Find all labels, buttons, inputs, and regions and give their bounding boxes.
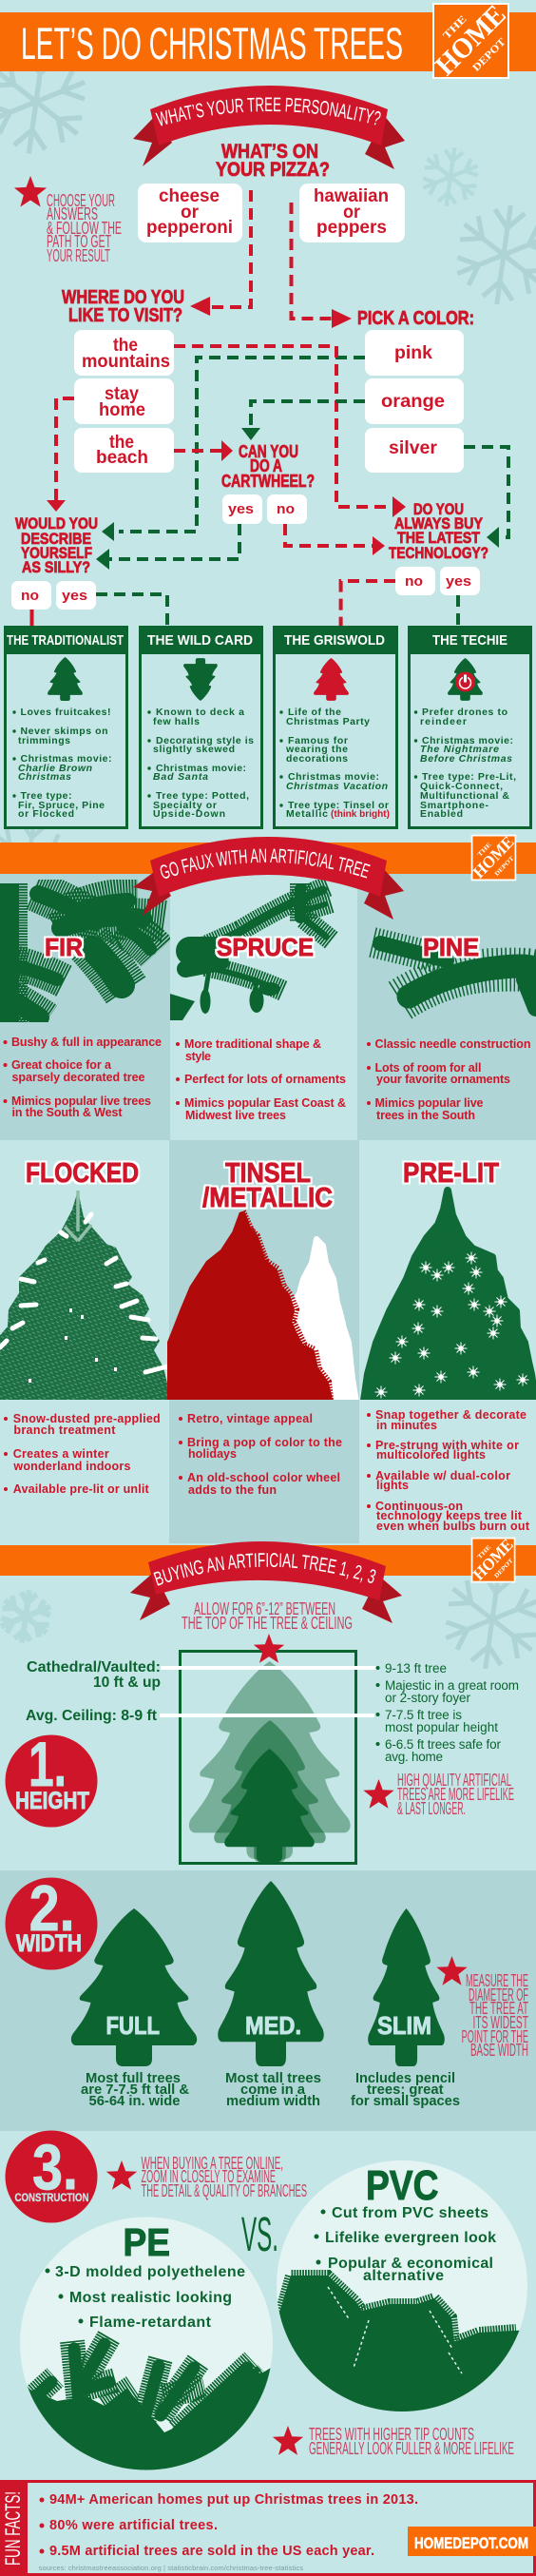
tree: slim bbox=[368, 1908, 445, 2066]
badge: 3 construction: 3. bbox=[32, 2131, 78, 2203]
question: would you describe yourself as silly: WOULD YOU bbox=[15, 514, 98, 533]
panel: the traditionalist: Christmas bbox=[18, 771, 71, 783]
badge: 1 height: 1. bbox=[29, 1729, 67, 1799]
text: pre-lit bullets: Continuous-on bbox=[375, 1500, 463, 1513]
text: medium description: medium width bbox=[226, 2094, 320, 2109]
text: flocked bullets: Creates a winter bbox=[13, 1447, 109, 1461]
text: spruce bullets: Midwest live trees bbox=[185, 1109, 286, 1122]
answers: cartwheel yes no: yes bbox=[228, 501, 254, 517]
badge: 2 width bbox=[6, 1872, 97, 1970]
question: what's on your pizza: WHAT’S ON bbox=[221, 141, 318, 163]
panel: the techie: Quick-Connect, bbox=[420, 781, 503, 792]
panel: the griswold: Life of the bbox=[288, 707, 341, 718]
answer: the mountains bbox=[74, 330, 174, 376]
text: fir bullets: sparsely decorated tree bbox=[11, 1071, 145, 1084]
panel: the griswold: Christmas Vacation bbox=[286, 781, 388, 792]
panel: the griswold: (think bright) bbox=[331, 808, 390, 820]
panel: the wild card: Upside-Down bbox=[153, 808, 225, 820]
panel: the wild card: slightly skewed bbox=[153, 744, 235, 755]
answer: silver: silver bbox=[389, 438, 438, 458]
arrow: pink path bbox=[102, 358, 365, 541]
logo: small home depot: DEPOT bbox=[493, 855, 516, 878]
panel: the wild card: Decorating style is bbox=[156, 735, 254, 746]
answer: cheese or pepperoni: cheese bbox=[159, 186, 220, 206]
text: flocked bullets: wonderland indoors bbox=[12, 1460, 130, 1473]
text: fir bullets: in the South & West bbox=[11, 1106, 123, 1119]
question: pick a color: PICK A COLOR: bbox=[357, 308, 474, 329]
panel: the techie: Before Christmas bbox=[420, 753, 512, 765]
text: slim description: trees; great bbox=[367, 2082, 444, 2098]
text: pre-lit bullets: even when bulbs burn out bbox=[376, 1520, 530, 1533]
question: do you always buy the latest technology: ALWAYS BUY bbox=[394, 514, 484, 533]
label: average ceiling: Avg. Ceiling: 8-9 ft bbox=[26, 1708, 158, 1724]
panel: the techie: reindeer bbox=[420, 716, 467, 727]
panel: the traditionalist: or Flocked bbox=[18, 808, 74, 820]
answer: stay home bbox=[74, 378, 174, 424]
heading: PE: PE bbox=[124, 2220, 170, 2264]
text: fun fact list bbox=[40, 2492, 418, 2559]
panel: the griswold: wearing the bbox=[285, 744, 348, 755]
question: do you always buy the latest technology bbox=[389, 500, 488, 562]
panel: the techie: Tree type: Pre-Lit, bbox=[422, 771, 516, 783]
answers: technology no yes: yes bbox=[446, 573, 471, 590]
text: flocked bullets: branch treatment bbox=[13, 1424, 116, 1437]
icon: snowflake right bbox=[447, 199, 536, 311]
ribbon: go faux with an artificial tree: GO FAUX WITH AN ARTIFICIAL TREE bbox=[160, 848, 371, 879]
answer: pink: pink bbox=[394, 343, 432, 363]
arrow: cartwheel no bbox=[285, 524, 385, 555]
badge: 1 height: HEIGHT bbox=[15, 1788, 89, 1814]
panel: the wild card: Bad Santa bbox=[153, 771, 208, 783]
arrow: beach path bbox=[174, 440, 233, 461]
answer: cheese or pepperoni: pepperoni bbox=[146, 218, 233, 238]
panel: the wild card: Tree type: Potted, bbox=[156, 790, 249, 802]
tree: full bbox=[71, 1908, 197, 2066]
text: pine bullets: Lots of room for all bbox=[374, 1061, 481, 1075]
callout: choose your answers: & FOLLOW THE bbox=[47, 219, 122, 238]
logo: small home depot: THE bbox=[476, 1544, 492, 1560]
text: full description: Most full trees bbox=[86, 2071, 181, 2086]
callout: allow for 6-12 inches: THE TOP OF THE TREE & CEILING bbox=[182, 1614, 353, 1633]
text: PE bullets: Most realistic looking bbox=[69, 2290, 232, 2306]
text: pine bullets bbox=[367, 1037, 530, 1122]
panel: the griswold: Christmas Party bbox=[286, 716, 370, 727]
panel: flocked bbox=[0, 1160, 167, 1495]
callout: allow for 6-12 inches bbox=[182, 1599, 353, 1633]
badge: 3 construction bbox=[6, 2130, 97, 2223]
text: flocked bullets bbox=[4, 1412, 161, 1496]
text: medium description bbox=[225, 2071, 321, 2109]
question: can you do a cartwheel: CARTWHEEL? bbox=[221, 472, 315, 491]
text: height bullets: 6-6.5 ft trees safe for bbox=[385, 1737, 502, 1752]
callout: high quality: & LAST LONGER. bbox=[397, 1799, 466, 1818]
heading: pre-lit: PRE-LIT bbox=[403, 1158, 499, 1189]
header band bbox=[0, 12, 536, 71]
text: PE bullets: 3-D molded polyethelene bbox=[55, 2264, 245, 2280]
panel: the wild card: few halls bbox=[153, 716, 200, 727]
icon: red tree bbox=[314, 658, 349, 701]
text: PVC bullets bbox=[314, 2205, 496, 2284]
text: tinsel bullets: holidays bbox=[188, 1447, 237, 1461]
answers: technology no yes bbox=[395, 567, 480, 595]
text: slim description: for small spaces bbox=[351, 2094, 460, 2109]
question: do you always buy the latest technology: TECHNOLOGY? bbox=[389, 544, 488, 562]
text: height bullets: 9-13 ft tree bbox=[385, 1661, 447, 1675]
tree: slim: SLIM bbox=[377, 2011, 431, 2040]
badge: 3 construction: CONSTRUCTION bbox=[15, 2193, 89, 2204]
answers: technology no yes: no bbox=[405, 573, 423, 590]
panel: fir bbox=[0, 874, 170, 1140]
panel: PVC circle bbox=[276, 2160, 532, 2425]
section band: buying bbox=[0, 1545, 536, 1576]
text: pre-lit bullets: technology keeps tree lit bbox=[376, 1509, 523, 1522]
logo: The Home Depot: DEPOT bbox=[470, 36, 508, 74]
logo: small home depot: THE bbox=[476, 842, 493, 859]
tree: medium: MED. bbox=[245, 2011, 301, 2040]
answer: the beach: beach bbox=[96, 448, 148, 468]
text: spruce bullets: Mimics popular East Coast & bbox=[184, 1096, 346, 1110]
panel: the traditionalist: Tree type: bbox=[21, 790, 72, 802]
image: pre-lit tree bbox=[363, 1191, 536, 1407]
question: what's on your pizza bbox=[216, 141, 330, 181]
heading: PVC: PVC bbox=[366, 2162, 439, 2209]
callout: choose your answers: YOUR RESULT bbox=[47, 246, 110, 265]
panel: the techie: THE TECHIE bbox=[432, 632, 507, 649]
text: PE bullets bbox=[46, 2264, 245, 2331]
label: cathedral vaulted: Cathedral/Vaulted: bbox=[27, 1659, 161, 1675]
text: spruce bullets bbox=[176, 1037, 346, 1122]
icon: tree with power button bbox=[448, 658, 483, 701]
arrow: cartwheel yes bbox=[96, 524, 239, 570]
text: spruce bullets: style bbox=[185, 1050, 211, 1063]
arrow: mountains path bbox=[174, 346, 406, 517]
panel: the techie: The Nightmare bbox=[420, 744, 499, 755]
callout: choose your answers bbox=[14, 176, 122, 265]
arrow: cheese to where do you like to visit bbox=[190, 190, 251, 316]
text: full description: 56-64 in. wide bbox=[89, 2094, 181, 2109]
heading: tinsel metallic bbox=[202, 1158, 333, 1213]
callout: when buying online bbox=[106, 2154, 307, 2200]
text: pre-lit bullets: lights bbox=[376, 1479, 409, 1492]
panel: fun facts bbox=[0, 2480, 536, 2576]
answer: orange: orange bbox=[381, 392, 445, 412]
image: pine branch bbox=[373, 942, 536, 1008]
icon: section 3 small snowflake bbox=[0, 1586, 56, 1647]
panel: the griswold: Famous for bbox=[288, 735, 348, 746]
text: PVC bullets: Cut from PVC sheets bbox=[332, 2205, 488, 2221]
panel: the techie: Smartphone- bbox=[420, 800, 488, 811]
arrow: silver path bbox=[464, 447, 508, 548]
heading: flocked: FLOCKED bbox=[26, 1158, 139, 1189]
logo: small home depot: DEPOT bbox=[493, 1557, 515, 1579]
text: pre-lit bullets bbox=[367, 1408, 530, 1533]
panel: the griswold: Tree type: Tinsel or bbox=[288, 800, 389, 811]
heading: fir: FIR bbox=[45, 933, 83, 961]
text: fun fact list: 94M+ American homes put up Christmas trees in 2013. bbox=[49, 2492, 418, 2508]
ribbon: go faux with an artificial tree bbox=[133, 837, 404, 920]
ribbon: what's your tree personality: WHAT’S YOUR TREE PERSONALITY? bbox=[156, 97, 381, 126]
connector: silly yes to wild card bbox=[96, 594, 167, 626]
text: fun fact list: 80% were artificial trees. bbox=[49, 2518, 218, 2533]
question: where do you like to visit: WHERE DO YOU bbox=[62, 287, 184, 308]
panel: the wild card: Specialty or bbox=[153, 800, 217, 811]
text: sources: sources: christmastreeassociation.org | statisticbrain.com/christmas-tree-statistics bbox=[39, 2564, 303, 2572]
text: height bullets: Majestic in a great room bbox=[385, 1678, 519, 1693]
panel: the traditionalist: Fir, Spruce, Pine bbox=[18, 800, 105, 811]
panel: the wild card: Known to deck a bbox=[156, 707, 244, 718]
chart: tree height diagram bbox=[160, 1634, 376, 1864]
text: pre-lit bullets: in minutes bbox=[376, 1419, 437, 1432]
connector: technology no to griswold bbox=[341, 581, 395, 626]
answers: cartwheel yes no bbox=[222, 494, 307, 524]
icon: snowflake lower left bbox=[0, 812, 78, 909]
text: tinsel bullets bbox=[179, 1412, 342, 1497]
callout: choose your answers: ANSWERS bbox=[47, 204, 98, 223]
text: fun fact list: 9.5M artificial trees are sold in the US each year. bbox=[49, 2544, 374, 2559]
text: height bullets bbox=[376, 1661, 519, 1764]
text: height bullets: avg. home bbox=[385, 1750, 443, 1764]
answer: cheese or pepperoni: or bbox=[181, 203, 200, 223]
icon: section 3 large snowflake bbox=[435, 1563, 536, 1675]
panel: the griswold bbox=[273, 626, 398, 827]
label: cathedral vaulted bbox=[27, 1659, 161, 1691]
text: spruce bullets: Perfect for lots of ornaments bbox=[184, 1073, 346, 1086]
text: flocked bullets: Available pre-lit or unlit bbox=[13, 1482, 150, 1496]
answer: hawaiian or peppers: hawaiian bbox=[314, 186, 389, 206]
answer: orange bbox=[365, 378, 464, 424]
ribbon: buying an artificial tree 1 2 3: BUYING AN ARTIFICIAL TREE 1, 2, 3 bbox=[154, 1553, 376, 1586]
text: height bullets: or 2-story foyer bbox=[385, 1691, 471, 1705]
text: pre-lit bullets: Available w/ dual-color bbox=[375, 1469, 510, 1482]
callout: higher tip counts bbox=[273, 2425, 514, 2458]
answer: hawaiian or peppers bbox=[299, 184, 405, 242]
panel: the traditionalist: Loves fruitcakes! bbox=[21, 707, 110, 718]
question: where do you like to visit: LIKE TO VISIT? bbox=[68, 305, 182, 326]
text: pre-lit bullets: Snap together & decorate bbox=[375, 1408, 526, 1422]
icon: snowflake top left bbox=[0, 43, 96, 161]
ribbon: what's your tree personality bbox=[133, 86, 405, 169]
answer: stay home: stay bbox=[105, 384, 139, 404]
answer: pink bbox=[365, 330, 464, 376]
text: fir bullets: Bushy & full in appearance bbox=[11, 1036, 162, 1049]
label: cathedral vaulted: 10 ft & up bbox=[93, 1675, 161, 1691]
arrow: hawaiian to pick a color bbox=[291, 203, 352, 328]
arrow: orange path bbox=[241, 401, 365, 440]
answers: silly no yes bbox=[11, 581, 96, 610]
answer: the beach: the bbox=[109, 433, 134, 453]
panel: the techie bbox=[408, 626, 532, 827]
icon: small snowflake bbox=[416, 144, 485, 210]
panel: the wild card: THE WILD CARD bbox=[147, 632, 253, 649]
text: spruce bullets: More traditional shape & bbox=[184, 1037, 321, 1051]
panel: pre-lit bbox=[359, 1140, 536, 1543]
logo: small home depot: HOME bbox=[469, 832, 517, 882]
panel: the wild card: Christmas movie: bbox=[156, 763, 246, 774]
text: tinsel bullets: An old-school color wheel bbox=[187, 1471, 340, 1484]
text: pine bullets: your favorite ornaments bbox=[376, 1073, 510, 1086]
icon: upside-down tree bbox=[183, 658, 218, 701]
text: PE bullets: Flame-retardant bbox=[89, 2315, 212, 2331]
question: can you do a cartwheel bbox=[221, 442, 315, 491]
answers: silly no yes: yes bbox=[62, 588, 87, 604]
answer: silver bbox=[365, 428, 464, 473]
callout: allow for 6-12 inches: ALLOW FOR 6”-12” BETWEEN bbox=[194, 1599, 335, 1618]
panel: the traditionalist: trimmings bbox=[18, 735, 70, 746]
answer: cheese or pepperoni bbox=[138, 184, 242, 242]
text: tinsel bullets: adds to the fun bbox=[188, 1483, 277, 1497]
panel: the traditionalist: Charlie Brown bbox=[18, 763, 92, 774]
answer: the mountains: the bbox=[113, 336, 138, 356]
logo: The Home Depot: THE bbox=[441, 13, 469, 42]
panel: the traditionalist: Christmas movie: bbox=[21, 753, 112, 765]
callout: when buying online: ZOOM IN CLOSELY TO EXAMINE bbox=[141, 2167, 276, 2186]
text: pine bullets: Classic needle construction bbox=[374, 1037, 530, 1051]
text: medium description: come in a bbox=[240, 2082, 306, 2098]
connector: technology yes to techie bbox=[456, 595, 460, 626]
badge: 1 height bbox=[6, 1729, 97, 1828]
image: red and white tinsel trees bbox=[167, 1211, 357, 1407]
heading: tinsel metallic: TINSEL bbox=[225, 1158, 311, 1189]
text: tinsel bullets: Retro, vintage appeal bbox=[187, 1412, 313, 1425]
panel: PE circle bbox=[19, 2218, 273, 2482]
panel: the griswold: Metallic bbox=[286, 808, 328, 820]
panel: the griswold: decorations bbox=[286, 753, 348, 765]
text: pre-lit bullets: Pre-strung with white or bbox=[375, 1439, 519, 1452]
answer: hawaiian or peppers: or bbox=[343, 203, 361, 223]
panel: tinsel metallic bbox=[167, 1140, 359, 1543]
text: flocked bullets: Snow-dusted pre-applied bbox=[13, 1412, 161, 1425]
question: can you do a cartwheel: DO A bbox=[250, 456, 282, 475]
panel: the wild card bbox=[139, 626, 263, 827]
panel: the traditionalist bbox=[4, 626, 128, 827]
heading: pine: PINE bbox=[423, 933, 479, 961]
text: slim description: Includes pencil bbox=[355, 2071, 455, 2086]
question: where do you like to visit bbox=[62, 287, 184, 326]
badge: 2 width: WIDTH bbox=[16, 1930, 82, 1957]
panel: the techie: Prefer drones to bbox=[422, 707, 507, 718]
text: fir bullets: Mimics popular live trees bbox=[11, 1094, 151, 1108]
logo: small home depot: HOME bbox=[469, 1535, 517, 1584]
panel: the griswold: THE GRISWOLD bbox=[284, 632, 385, 649]
panel: the griswold: Christmas movie: bbox=[288, 771, 379, 783]
image: PE foliage bbox=[19, 2336, 271, 2482]
text: height bullets: 7-7.5 ft tree is bbox=[385, 1708, 462, 1722]
text: full description bbox=[81, 2071, 190, 2109]
image: PVC foliage bbox=[278, 2270, 519, 2411]
question: can you do a cartwheel: CAN YOU bbox=[239, 442, 298, 461]
answer: the mountains: mountains bbox=[82, 352, 170, 372]
answer: stay home: home bbox=[99, 400, 145, 420]
text: full description: are 7-7.5 ft tall & bbox=[81, 2082, 190, 2098]
tree: medium bbox=[218, 1881, 324, 2066]
callout: when buying online: WHEN BUYING A TREE ONLINE, bbox=[141, 2154, 283, 2173]
callout: measure the diameter bbox=[436, 1956, 528, 2060]
text: tinsel bullets: Bring a pop of color to the bbox=[187, 1436, 342, 1449]
text: VS. bbox=[241, 2207, 278, 2261]
badge: 2 width: 2. bbox=[29, 1872, 75, 1945]
panel: the traditionalist: Never skimps on bbox=[21, 726, 108, 737]
arrow: stay home path bbox=[47, 398, 74, 512]
answer: the beach bbox=[74, 428, 174, 473]
text: pine bullets: Mimics popular live bbox=[374, 1096, 484, 1110]
ribbon: buying an artificial tree 1 2 3 bbox=[130, 1541, 402, 1623]
answer: hawaiian or peppers: peppers bbox=[316, 218, 387, 238]
section band: go faux bbox=[0, 843, 536, 874]
question: would you describe yourself as silly bbox=[15, 514, 98, 576]
callout: choose your answers: CHOOSE YOUR bbox=[47, 191, 115, 210]
image: fir branches bbox=[0, 883, 164, 1022]
question: would you describe yourself as silly: DESCRIBE bbox=[21, 530, 91, 548]
image: flocked tree bbox=[0, 1191, 173, 1407]
question: do you always buy the latest technology: DO YOU bbox=[413, 500, 464, 518]
text: fir bullets: Great choice for a bbox=[11, 1058, 112, 1072]
panel: spruce bbox=[170, 880, 346, 1119]
image: spruce branch bbox=[170, 883, 332, 1020]
question: would you describe yourself as silly: YOURSELF bbox=[21, 544, 92, 562]
text: slim description bbox=[351, 2071, 460, 2109]
answers: silly no yes: no bbox=[21, 588, 39, 604]
button: homedepot.com bbox=[408, 2527, 536, 2556]
callout: choose your answers: PATH TO GET bbox=[47, 232, 111, 251]
icon: green tree bbox=[48, 657, 83, 701]
callout: high quality bbox=[363, 1771, 514, 1818]
text: pine bullets: trees in the South bbox=[376, 1109, 475, 1122]
heading: tinsel metallic: /METALLIC bbox=[202, 1183, 333, 1213]
text: PVC bullets: Lifelike evergreen look bbox=[325, 2230, 496, 2246]
connector: silly no to traditionalist bbox=[30, 610, 34, 626]
callout: when buying online: THE DETAIL & QUALITY OF BRANCHES bbox=[141, 2181, 307, 2200]
answers: cartwheel yes no: no bbox=[277, 501, 295, 517]
panel: the techie: Multifunctional & bbox=[420, 790, 509, 802]
text: height bullets: most popular height bbox=[385, 1720, 498, 1734]
text: pre-lit bullets: multicolored lights bbox=[376, 1448, 486, 1462]
panel: width bbox=[0, 1870, 536, 2131]
heading: spruce: SPRUCE bbox=[217, 933, 314, 961]
panel: the techie: Enabled bbox=[420, 808, 463, 820]
text: PVC bullets: alternative bbox=[363, 2268, 444, 2284]
text: PVC bullets: Popular & economical bbox=[328, 2256, 493, 2272]
question: would you describe yourself as silly: AS SILLY? bbox=[22, 558, 90, 576]
tree: full: FULL bbox=[106, 2011, 160, 2040]
panel: the techie: Christmas movie: bbox=[422, 735, 513, 746]
heading: fun facts: FUN FACTS! bbox=[1, 2491, 25, 2566]
question: do you always buy the latest technology: THE LATEST bbox=[397, 529, 481, 547]
text: medium description: Most tall trees bbox=[225, 2071, 321, 2086]
question: what's on your pizza: YOUR PIZZA? bbox=[216, 159, 330, 181]
panel: the traditionalist: THE TRADITIONALIST bbox=[7, 632, 124, 649]
panel: pine bbox=[357, 874, 536, 1140]
text: fir bullets bbox=[4, 1036, 162, 1119]
